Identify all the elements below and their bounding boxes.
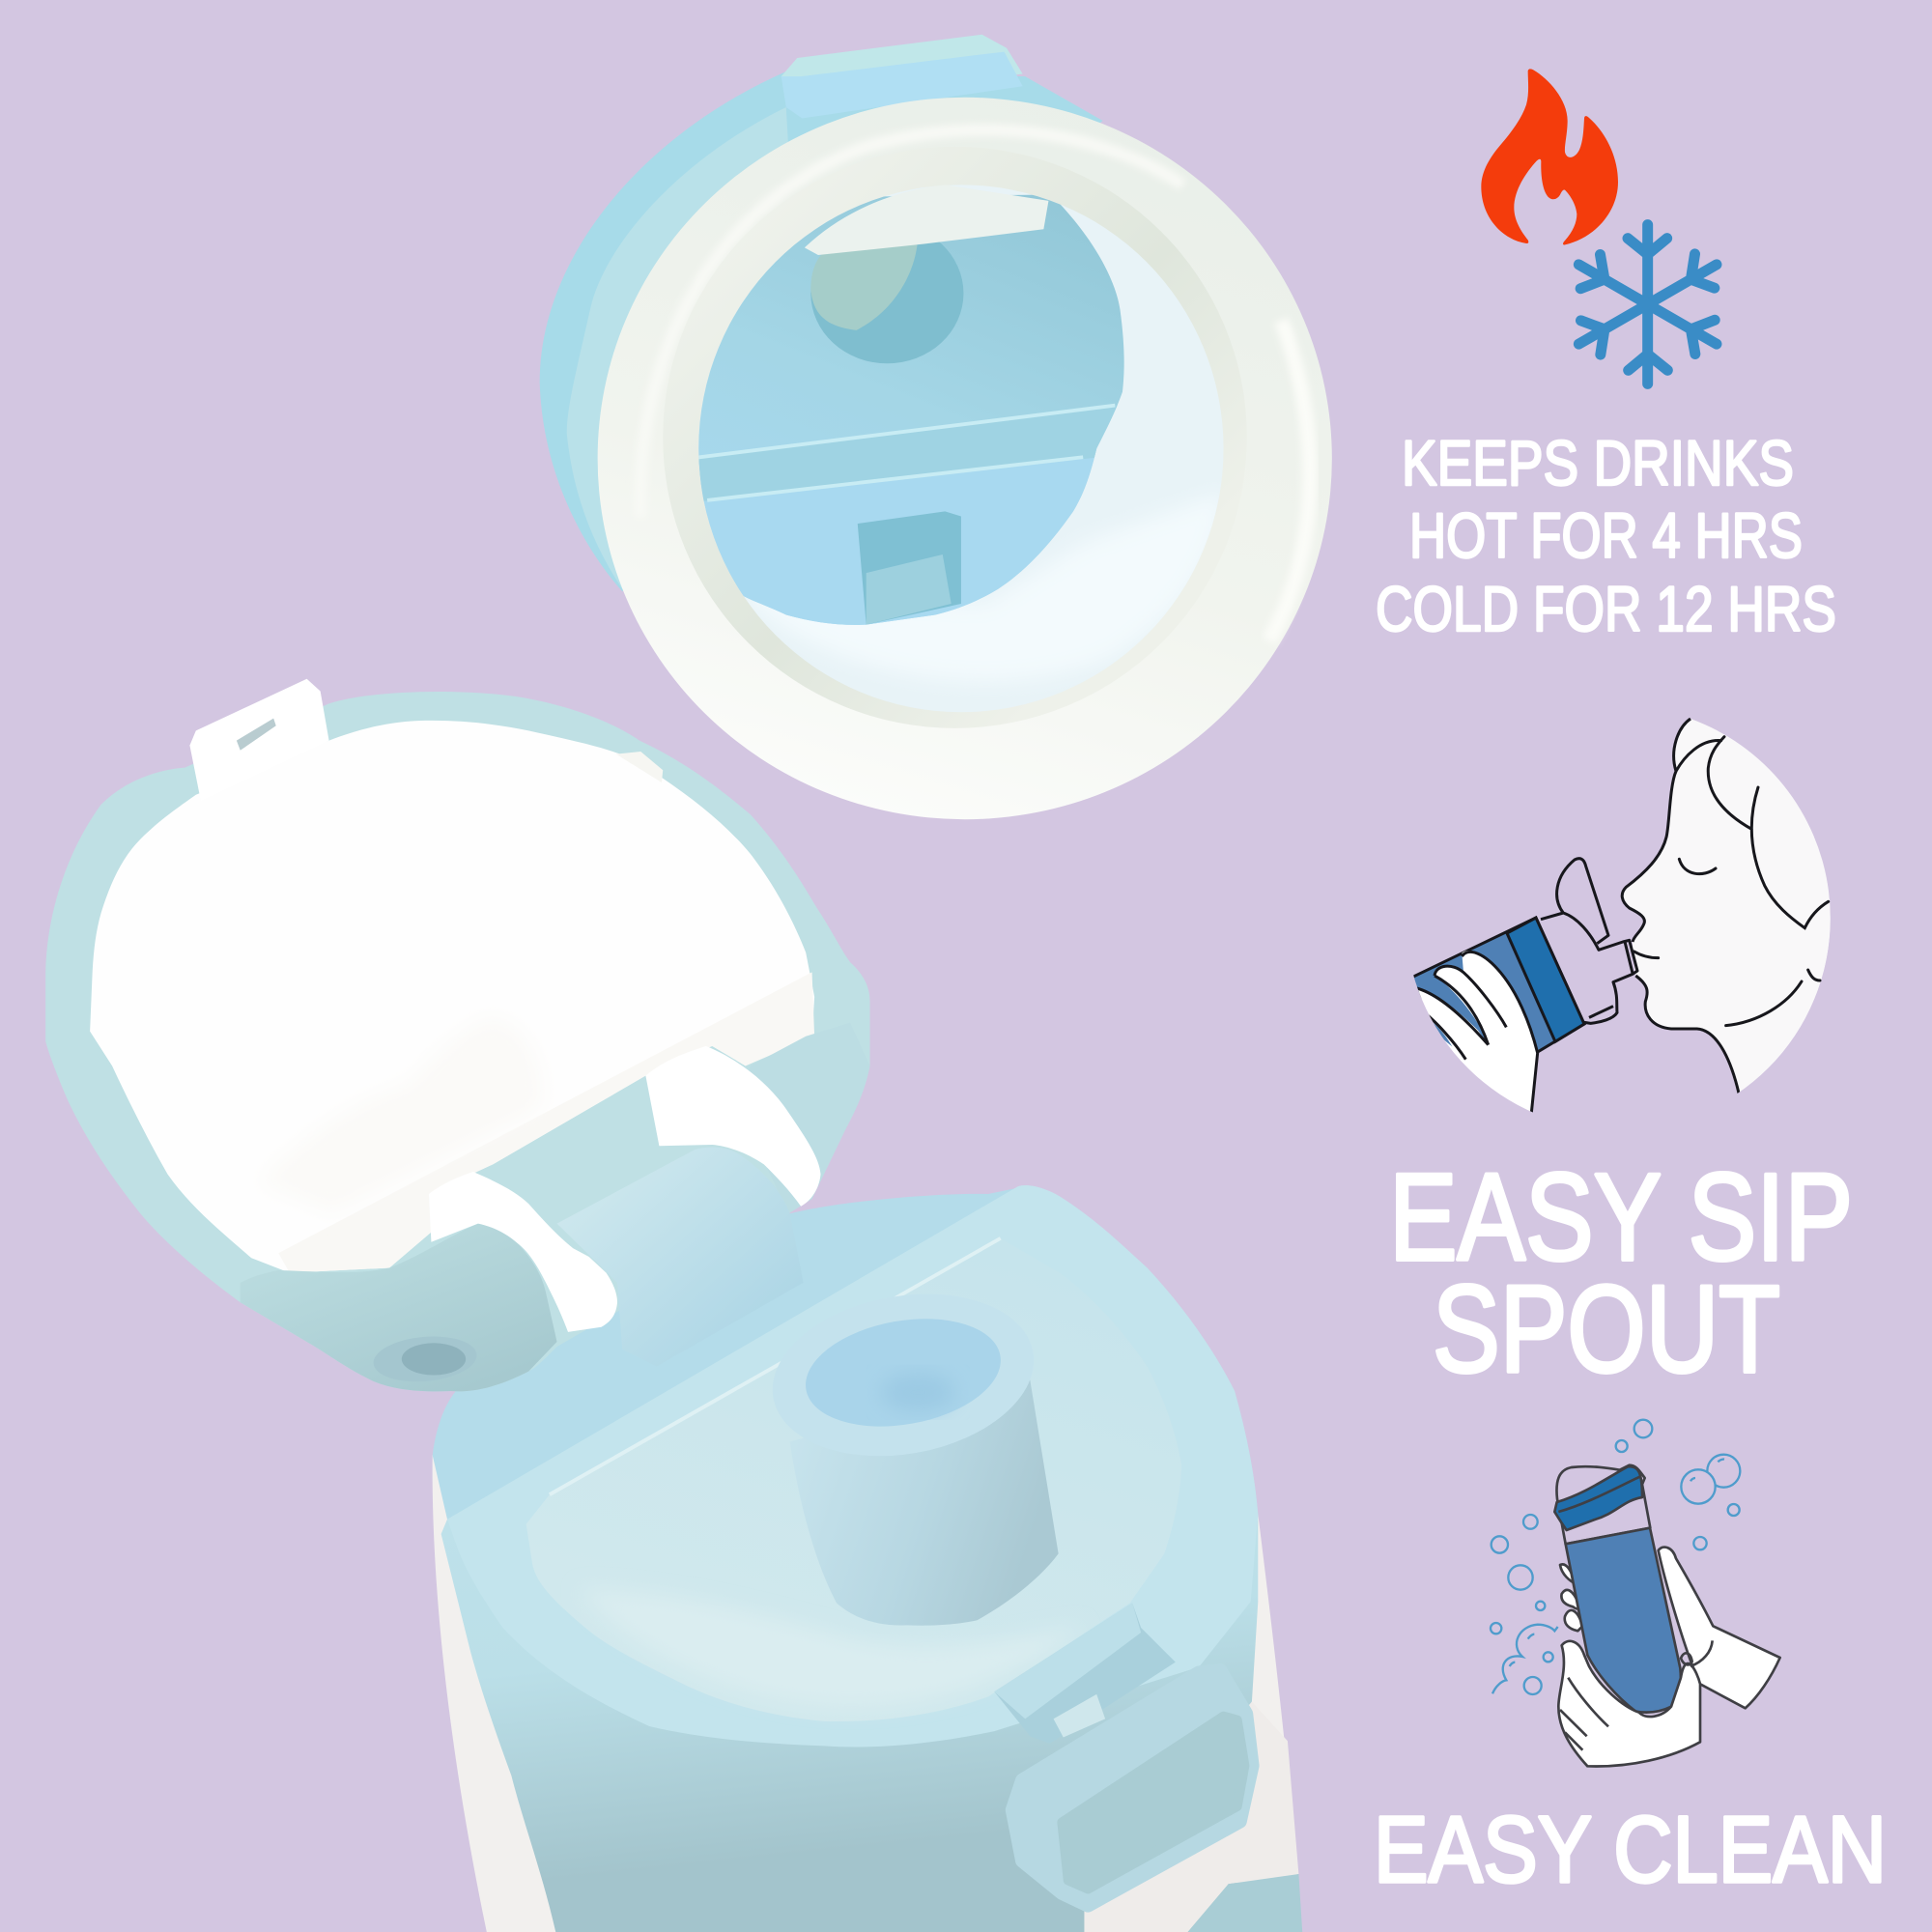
lid notch [616, 752, 663, 782]
white clip left [429, 1172, 617, 1332]
bottle cap and spout lines [1541, 859, 1637, 1023]
lid hinge knuckle left [241, 1224, 557, 1391]
bottle [1554, 1465, 1681, 1713]
text: insulation claim [1376, 427, 1836, 644]
lid white interior [90, 721, 814, 1273]
face details [1634, 737, 1829, 1026]
spout [759, 1274, 1059, 1626]
cap blue rim [540, 71, 1103, 591]
square socket [858, 511, 961, 625]
white clip right [645, 1046, 820, 1207]
photo: bottle body [433, 1185, 1302, 1932]
cap inner cavity [698, 185, 1223, 712]
hinge right blue [739, 1023, 870, 1213]
inner ridge [690, 403, 1133, 502]
cap tab [781, 35, 1023, 118]
lower floor [703, 443, 1099, 625]
text: insulation claim: HOT FOR 4 HRS [1409, 499, 1803, 571]
bubbles [1491, 1420, 1740, 1694]
back dome [433, 1186, 1060, 1520]
face [1622, 719, 1831, 1094]
lid floor band [278, 972, 814, 1273]
icon: washing bottle [1491, 1420, 1780, 1767]
flat top ring [447, 1185, 1258, 1747]
hand [1418, 951, 1536, 1112]
hands [1560, 1548, 1780, 1708]
latch recess [994, 1603, 1176, 1744]
lid loop tab [189, 679, 329, 801]
icon: snowflake [1569, 225, 1726, 384]
cap white threaded ring [598, 98, 1332, 819]
white stripe right [1084, 1701, 1298, 1932]
heading: easy sip spout: SPOUT [1433, 1261, 1780, 1399]
white body base [433, 1355, 1301, 1932]
hinge block [557, 1148, 804, 1367]
latch button [1012, 1671, 1252, 1905]
lid outer blue shell [45, 692, 870, 1391]
photo: bottle cap underside [45, 35, 1332, 1932]
inner blue floor [690, 185, 1133, 629]
drink hole [810, 242, 964, 363]
text: insulation claim: KEEPS DRINKS [1402, 427, 1794, 498]
pin hole [372, 1332, 478, 1385]
text: insulation claim: COLD FOR 12 HRS [1376, 573, 1836, 644]
bottle bands [1408, 918, 1584, 1060]
heading: easy sip spout [1389, 1149, 1853, 1399]
top recessed panel [526, 1238, 1181, 1721]
icon: person sipping [1372, 719, 1831, 1118]
photo: open lid [45, 679, 870, 1391]
blue cap shell [441, 1185, 1258, 1932]
icon: flame [1481, 69, 1618, 244]
front hand [1558, 1640, 1713, 1767]
teal lower stripe [1188, 1874, 1302, 1932]
cap white tab inside [805, 185, 1048, 255]
